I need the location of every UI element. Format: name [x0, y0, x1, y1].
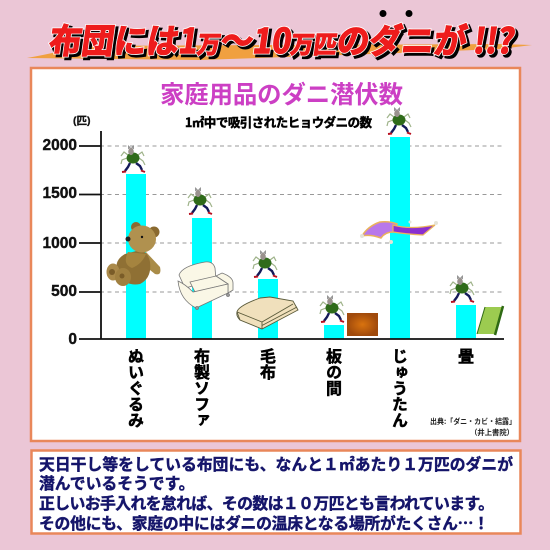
unit label: (匹) [73, 115, 90, 127]
body text: 天日干し等をしている布団にも、なんと１㎡あたり１万匹のダニが [39, 452, 513, 475]
category labels: 畳 [454, 348, 478, 364]
source note: （井上書院） [470, 427, 514, 438]
banner outline text: 布団には1万～10万匹のダニが !!? [47, 13, 519, 63]
decorative dakuten dots [380, 10, 412, 17]
axis tick labels: 500 [51, 283, 77, 300]
body text: その他にも、家庭の中にはダニの温床となる場所がたくさん…！ [39, 511, 489, 534]
panel: explanation text [32, 450, 520, 534]
icon: wooden floor [347, 313, 378, 336]
category labels: ぬいぐるみ [124, 348, 148, 428]
icon: folded blanket [237, 297, 298, 329]
axes [79, 131, 504, 339]
chart subtitle: 1㎡中で吸引されたヒョウダニの数 [185, 113, 373, 131]
icons: mites on bars [121, 108, 474, 322]
axis tick labels: 1500 [43, 185, 77, 202]
bar chart [43, 131, 504, 348]
category labels [124, 347, 478, 428]
body text [39, 452, 513, 534]
icon: tatami mat [477, 306, 503, 335]
category labels: 布製ソファ [190, 347, 214, 428]
category labels: 毛布 [256, 348, 280, 380]
panel: chart [31, 68, 520, 441]
icon: flying carpet [360, 220, 438, 244]
title banner [27, 10, 532, 65]
body text: 潜んでいるそうです。 [39, 471, 195, 494]
axis tick labels [43, 137, 77, 348]
source note [430, 416, 516, 438]
orange brush swoosh [27, 44, 532, 60]
banner heading text: 布団には1万～10万匹のダニが !!? [47, 13, 519, 63]
axis tick labels: 0 [68, 331, 77, 348]
source note: 出典:「ダニ・カビ・結露」 [430, 416, 516, 427]
bars [126, 137, 476, 339]
body text: 正しいお手入れを怠れば、その数は１０万匹とも言われています。 [39, 491, 494, 514]
icon: teddy bear [106, 222, 160, 286]
banner shadow text: 布団には1万～10万匹のダニが !!? [49, 16, 521, 65]
axis tick labels: 1000 [43, 235, 77, 252]
category labels: じゅうたん [388, 348, 412, 428]
icon: sofa [178, 262, 233, 310]
chart heading: 家庭用品のダニ潜伏数 [160, 76, 403, 111]
axis tick labels: 2000 [43, 137, 77, 154]
category labels: 板の間 [322, 348, 346, 396]
